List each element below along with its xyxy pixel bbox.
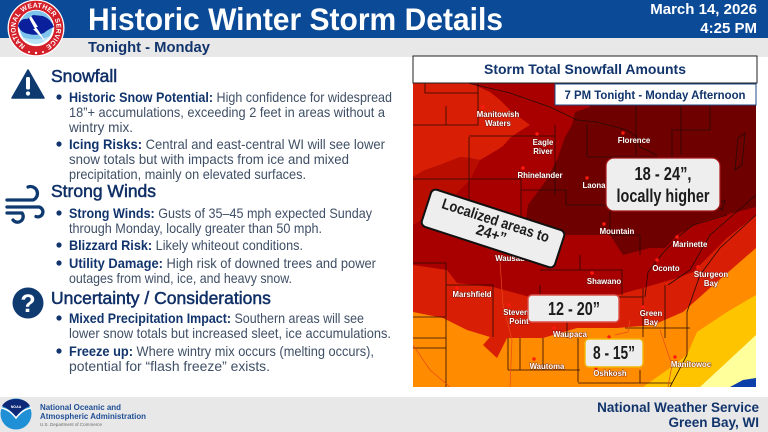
callout: 12-20: 12 - 20” (548, 298, 600, 319)
city labels: Oconto (652, 264, 680, 273)
bullet: strong winds: through Monday, locally greater than 50 mph. (69, 221, 322, 236)
city labels: Point (509, 317, 529, 326)
icon: NOAA logo: NOAA (11, 405, 22, 409)
NWS office text: National Weather Service (597, 400, 759, 415)
callout: localized areas: Localized areas to (440, 196, 551, 246)
icon: warning triangle (12, 70, 44, 98)
city labels: Oshkosh (593, 369, 627, 378)
city labels: Green (640, 309, 662, 318)
city labels: Waters (485, 119, 512, 128)
bullet: historic snow potential: Historic Snow Potential: High confidence for widespread (69, 90, 392, 105)
shoreline (645, 133, 756, 387)
city labels: Bay (644, 318, 659, 327)
icon: question mark (12, 288, 44, 318)
callout: 8-15 (585, 339, 643, 367)
bullet: mixed precipitation impact (56, 311, 391, 341)
icon: question mark: ? (20, 290, 36, 318)
bullet: freeze up: Freeze up: Where wintry mix occurs (melting occurs), (69, 344, 374, 359)
callout: 12-20 (528, 295, 619, 322)
date and time: 4:25 PM (700, 20, 757, 37)
city labels (452, 110, 728, 378)
bullet: historic snow potential (56, 90, 392, 135)
callout: 8-15: 8 - 15” (593, 342, 635, 363)
bullet: utility damage (56, 256, 376, 286)
panel: strong winds (7, 181, 376, 286)
subtitle: Tonight - Monday (88, 39, 211, 56)
city dots (455, 105, 700, 370)
heading: snowfall: Snowfall (51, 66, 117, 86)
city labels: Eagle (533, 138, 554, 147)
city labels: River (533, 147, 553, 156)
bullet: strong winds: Strong Winds: Gusts of 35–45 mph expected Sunday (69, 206, 372, 221)
city labels: Shawano (587, 277, 621, 286)
city labels: Laona (583, 181, 606, 190)
city labels: Steven (503, 308, 529, 317)
bullet: freeze up (56, 344, 374, 374)
icon: NOAA logo (0, 398, 32, 430)
callout: 18-24: 18 - 24”, (634, 163, 692, 184)
footer band (0, 397, 768, 432)
bullet: freeze up: potential for “flash freeze” exists. (69, 359, 270, 374)
city labels: Sturgeon (694, 270, 728, 279)
bullet: icing risks (56, 137, 385, 182)
icon: wind (7, 187, 43, 222)
callout: localized areas: 24+” (474, 221, 509, 247)
map: snowfall amounts (413, 83, 756, 388)
bullet: mixed precipitation impact: lower snow totals but increased sleet, ice accumulations. (69, 326, 391, 341)
city labels: Wausau (495, 254, 525, 263)
city labels: Waupaca (553, 330, 588, 339)
heading: uncertainty: Uncertainty / Considerations (51, 288, 271, 308)
bullet: icing risks: snow totals but with impacts from ice and mixed (69, 152, 349, 167)
callout: localized areas (420, 188, 566, 269)
county lines (413, 83, 710, 388)
city labels: Manitowish (477, 110, 519, 119)
bullet: icing risks: Icing Risks: Central and east-central WI will see lower (69, 137, 385, 152)
map title box: Storm Total Snowfall Amounts (484, 61, 686, 77)
bullet: historic snow potential: wintry mix. (68, 120, 133, 135)
icon: NWS logo: NATIONAL WEATHER SERVICE (10, 2, 62, 50)
city labels: Marinette (673, 240, 708, 249)
city labels: Rhinelander (517, 171, 563, 180)
date and time: March 14, 2026 (650, 1, 757, 18)
title: Historic Winter Storm Details (88, 1, 503, 37)
NOAA text (40, 402, 146, 428)
bullet: mixed precipitation impact: Mixed Precipitation Impact: Southern areas will see (69, 311, 364, 326)
NWS office text: Green Bay, WI (668, 415, 759, 430)
bullet: historic snow potential: 18”+ accumulations, exceeding 2 feet in areas without a (69, 105, 385, 120)
bullet: icing risks: precipitation, mainly on elevated surfaces. (69, 167, 306, 182)
time range box (555, 84, 756, 105)
map title box (413, 56, 757, 83)
header band (0, 0, 768, 57)
city labels: Florence (618, 136, 651, 145)
city labels: Mountain (600, 227, 635, 236)
NOAA text: U.S. Department of Commerce (40, 422, 102, 428)
bullet: blizzard risk: Blizzard Risk: Likely whiteout conditions. (69, 238, 303, 253)
date and time (650, 1, 757, 37)
bullet: utility damage: outages from wind, ice, and heavy snow. (69, 271, 292, 286)
callout: 18-24: locally higher (616, 185, 710, 206)
city labels: Wautoma (530, 362, 565, 371)
bullet: strong winds (56, 206, 372, 236)
heading: strong winds: Strong Winds (51, 181, 156, 201)
time range box: 7 PM Tonight - Monday Afternoon (564, 88, 746, 102)
highways (413, 262, 672, 387)
panel: snowfall (12, 66, 392, 182)
bullet: utility damage: Utility Damage: High risk of downed trees and power (69, 256, 376, 271)
NOAA text: National Oceanic and (40, 402, 121, 412)
city labels: Bay (704, 279, 719, 288)
city labels: Manitowoc (671, 360, 712, 369)
panel: uncertainty (12, 288, 391, 374)
city labels: Marshfield (452, 290, 492, 299)
callout: 18-24 (606, 158, 720, 211)
NOAA text: Atmospheric Administration (40, 411, 146, 421)
NWS office text (597, 400, 759, 430)
